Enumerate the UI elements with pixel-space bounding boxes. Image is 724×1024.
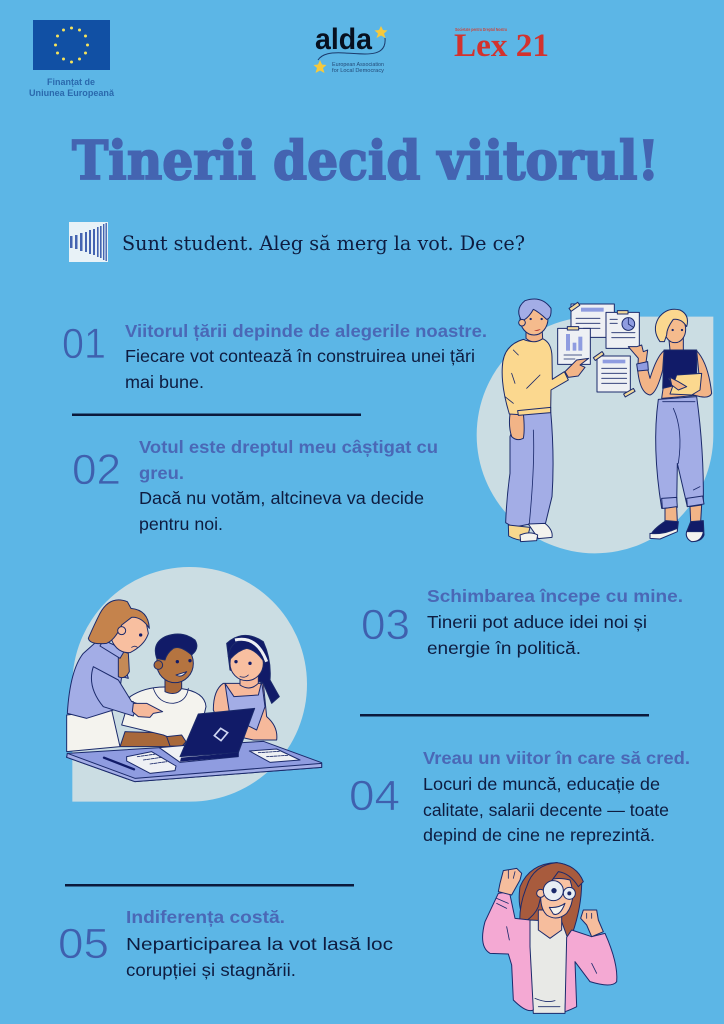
item 04: 04 <box>349 772 400 820</box>
documents on the wall <box>558 302 639 397</box>
logo: ALDA: European Association <box>332 62 384 68</box>
item 02: pentru noi. <box>139 514 223 534</box>
logo: ALDA <box>314 23 388 74</box>
item 01: 01 <box>62 320 106 368</box>
item 04: calitate, salarii decente — toate <box>423 800 669 820</box>
item 05: corupției și stagnării. <box>126 960 296 980</box>
item 02: Votul este dreptul meu câștigat cu <box>139 437 438 457</box>
item 03: Schimbarea începe cu mine. <box>427 586 683 606</box>
illustration: two people with documents <box>477 299 713 553</box>
laptop <box>159 708 255 762</box>
subtitle: Sunt student. Aleg să merg la vot. De ce? <box>122 231 525 255</box>
icon: perspective bars <box>69 222 108 262</box>
illustration: cheering girl with glasses <box>483 863 617 1013</box>
man in yellow sweater <box>502 299 589 542</box>
item 05: Neparticiparea la vot lasă loc <box>126 934 393 954</box>
item 03: Tinerii pot aduce idei noi și <box>427 612 647 632</box>
title: Tinerii decid viitorul! <box>72 130 659 192</box>
girl pointing <box>67 600 163 752</box>
item 03: 03 <box>361 601 410 649</box>
item 04: Vreau un viitor în care să cred. <box>423 748 690 768</box>
item 01: Viitorul țării depinde de alegerile noastre. <box>125 321 487 341</box>
item 01 <box>62 320 487 392</box>
item 03: energie în politică. <box>427 638 581 658</box>
girl with headband <box>213 635 279 740</box>
logo: Lex 21: Societate pentru Dreptul Nostru <box>455 27 507 32</box>
logo: EU flag with funding text <box>29 20 115 98</box>
logo: ALDA: alda <box>315 23 372 56</box>
logo: EU flag with funding text: Finanțat de <box>47 77 95 87</box>
item 04 <box>349 748 690 845</box>
item 04: Locuri de muncă, educație de <box>423 774 660 794</box>
woman with folder <box>628 309 712 542</box>
item 02: 02 <box>72 446 121 494</box>
item 04: depind de cine ne reprezintă. <box>423 825 655 845</box>
item 01: Fiecare vot contează în construirea unei țări <box>125 346 475 366</box>
logo: EU flag with funding text: Uniunea Europeană <box>29 88 115 98</box>
illustration: three students at laptop <box>67 567 322 802</box>
logo: ALDA: for Local Democracy <box>332 68 385 74</box>
desk with papers and pen <box>67 741 322 782</box>
item 02 <box>72 437 438 534</box>
item 01: mai bune. <box>125 372 204 392</box>
item 03 <box>361 586 683 658</box>
item 02: Dacă nu votăm, altcineva va decide <box>139 488 424 508</box>
item 05: 05 <box>58 920 109 968</box>
logo: Lex 21: Lex 21 <box>454 28 549 64</box>
item 02: greu. <box>139 463 184 483</box>
item 05: Indiferența costă. <box>126 907 285 927</box>
boy in white t-shirt <box>120 634 206 747</box>
item 05 <box>58 907 393 980</box>
